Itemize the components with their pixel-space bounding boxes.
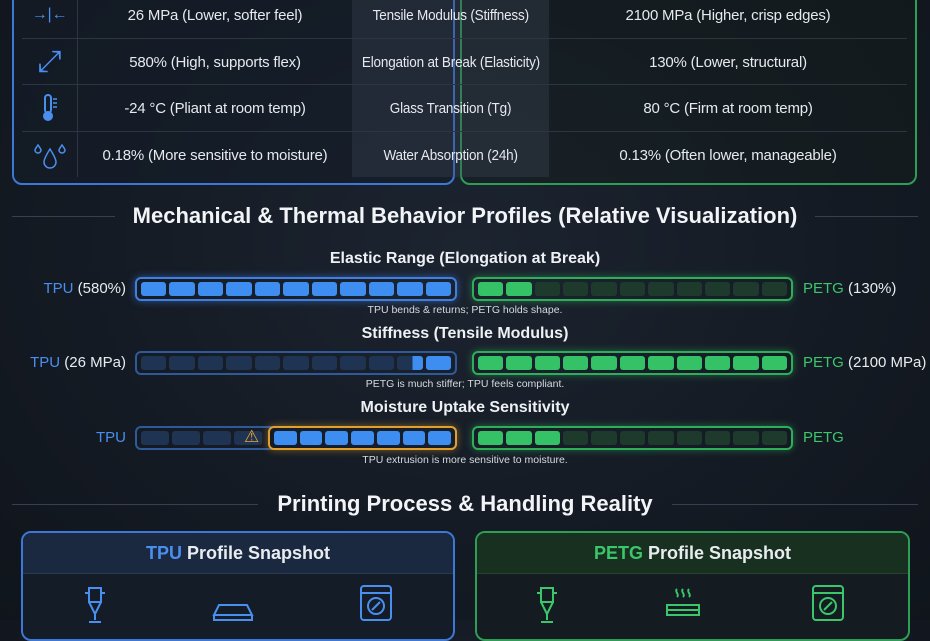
icon: compress arrows: →|← xyxy=(32,6,67,23)
panel: TPU values xyxy=(12,0,455,185)
text: PETG modulus: 2100 MPa (Higher, crisp edges) xyxy=(626,6,830,24)
icon: nozzle xyxy=(537,587,557,623)
heading: behavior profiles: Mechanical & Thermal Behavior Profiles (Relative Visualization) xyxy=(133,203,797,228)
text: PETG elongation: 130% (Lower, structural) xyxy=(649,54,807,70)
heading: PETG snapshot xyxy=(477,533,908,574)
icon: dryer xyxy=(360,585,392,621)
panel: TPU snapshot xyxy=(21,531,455,641)
heading: moisture: Moisture Uptake Sensitivity xyxy=(361,399,569,416)
icon: thermometer xyxy=(43,94,57,121)
bar: TPU stiffness xyxy=(135,351,457,375)
icon: dryer xyxy=(812,585,844,621)
panel: property names column xyxy=(352,0,549,177)
heading: PETG snapshot: PETG Profile Snapshot xyxy=(594,543,791,563)
label: TPU moisture: TPU xyxy=(96,429,126,446)
icon: heated bed xyxy=(666,588,700,616)
heading: printing process: Printing Process & Handling Reality xyxy=(277,491,653,516)
label: TPU 26: TPU (26 MPa) xyxy=(30,354,126,371)
caption: elastic: TPU bends & returns; PETG holds shape. xyxy=(368,304,562,316)
icon: water drops xyxy=(34,144,66,169)
bar: PETG moisture xyxy=(472,426,793,450)
text: PETG water: 0.13% (Often lower, manageable) xyxy=(619,146,837,164)
text: PETG Tg: 80 °C (Firm at room temp) xyxy=(643,100,813,116)
heading: stiffness: Stiffness (Tensile Modulus) xyxy=(362,325,568,342)
bar: TPU moisture xyxy=(135,426,457,450)
label: PETG moisture: PETG xyxy=(803,429,844,446)
heading: TPU snapshot: TPU Profile Snapshot xyxy=(146,543,330,563)
panel: PETG values xyxy=(460,0,917,185)
label: TPU 580: TPU (580%) xyxy=(43,280,126,297)
callout: moisture highlight xyxy=(268,426,457,450)
icon: stretch arrow: ⤢ xyxy=(38,45,61,78)
label: PETG 2100: PETG (2100 MPa) xyxy=(803,354,926,371)
bar: TPU elastic xyxy=(135,277,457,301)
bar: PETG elastic xyxy=(472,277,793,301)
text: property elongation: Elongation at Break (Elasticity) xyxy=(361,54,540,70)
text: property modulus: Tensile Modulus (Stiffness) xyxy=(372,6,529,24)
text: TPU modulus: 26 MPa (Lower, softer feel) xyxy=(128,6,302,24)
heading: elastic range: Elastic Range (Elongation at Break) xyxy=(330,250,600,267)
text: property Tg: Glass Transition (Tg) xyxy=(390,100,511,116)
text: TPU Tg: -24 °C (Pliant at room temp) xyxy=(124,100,306,116)
text: TPU elongation: 580% (High, supports flex) xyxy=(129,54,301,70)
text: TPU water: 0.18% (More sensitive to moisture) xyxy=(103,146,327,164)
icon: bed xyxy=(212,604,254,621)
icon: warning: ⚠ xyxy=(244,427,259,446)
bar: PETG stiffness xyxy=(472,351,793,375)
label: PETG 130: PETG (130%) xyxy=(803,280,896,297)
heading: TPU snapshot xyxy=(23,533,453,574)
caption: stiffness: PETG is much stiffer; TPU feels compliant. xyxy=(366,378,564,390)
icon: nozzle xyxy=(85,587,105,623)
caption: moisture: TPU extrusion is more sensitive to moisture. xyxy=(362,454,568,466)
panel: PETG snapshot xyxy=(475,531,910,641)
text: property water: Water Absorption (24h) xyxy=(383,146,518,164)
